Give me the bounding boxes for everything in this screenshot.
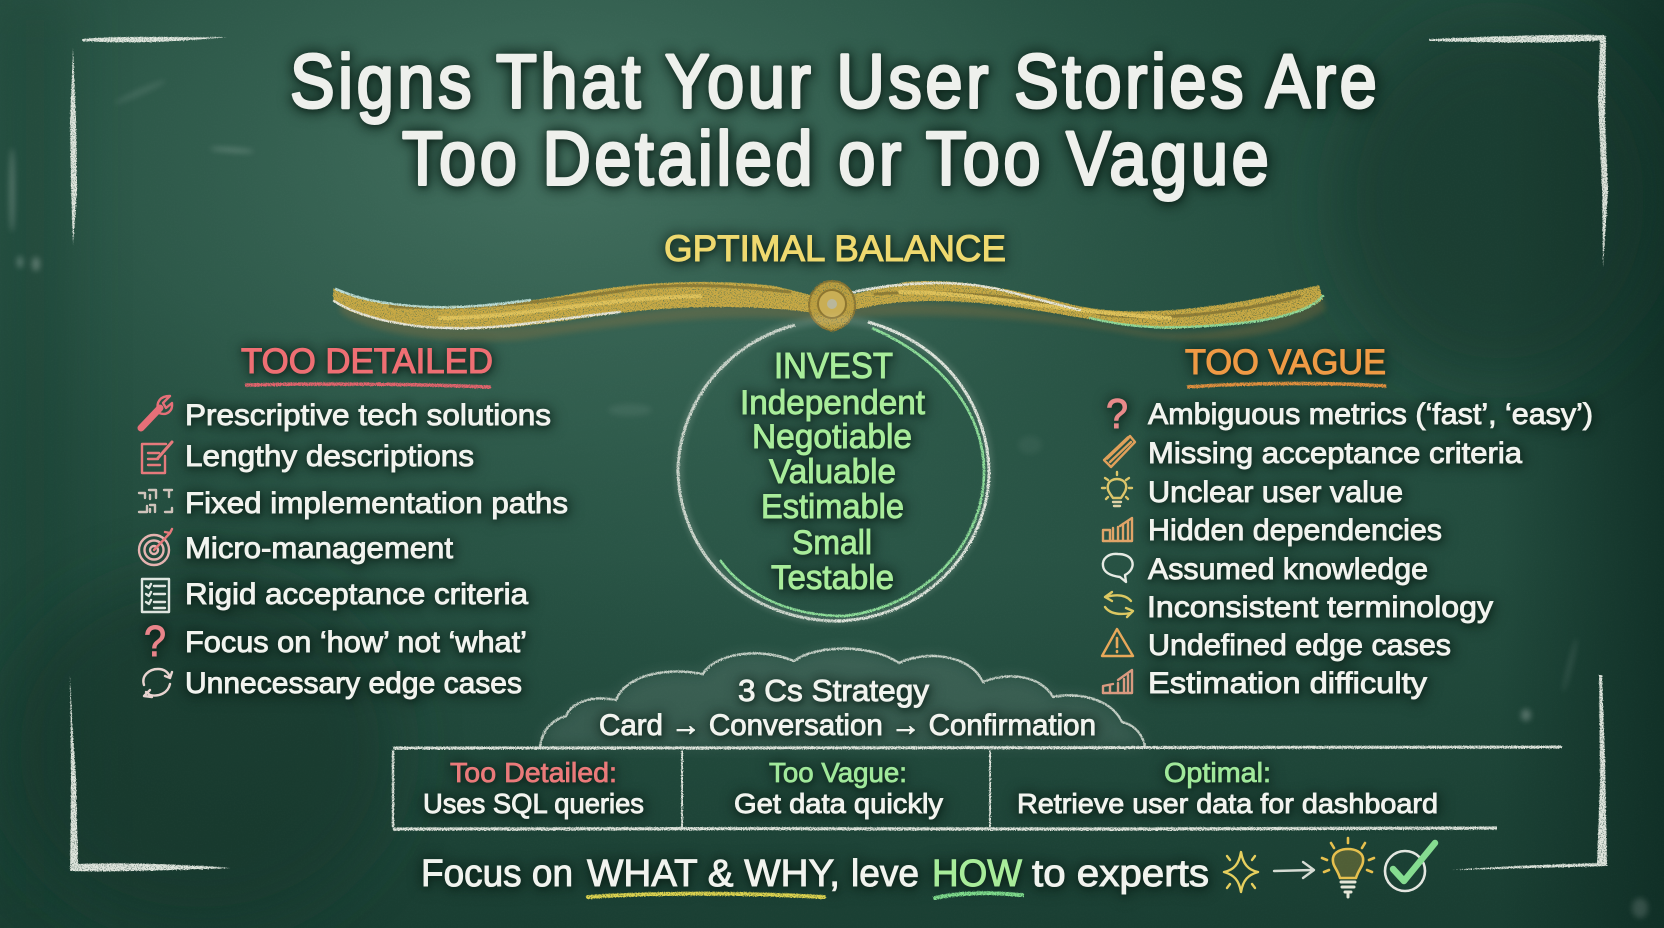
icon: bar chart — [1103, 518, 1132, 541]
footer message: to experts — [1032, 853, 1209, 895]
list: too vague signs: Inconsistent terminology — [1147, 591, 1493, 624]
invest list: Valuable — [769, 453, 896, 491]
cell: optimal: Optimal: — [1164, 757, 1271, 788]
table: user story examples — [393, 747, 1562, 829]
icon: bar chart small — [1103, 670, 1132, 693]
balance beam — [333, 281, 1326, 341]
icon: pencil — [1104, 436, 1135, 467]
cell: too vague: Get data quickly — [734, 788, 943, 819]
list: too detailed signs — [185, 399, 568, 700]
cell: optimal: Retrieve user data for dashboard — [1017, 788, 1438, 819]
cloud: 3 Cs strategy — [540, 648, 1145, 747]
list: too detailed signs: Unnecessary edge cases — [185, 667, 522, 700]
heading: too vague: TOO VAGUE — [1185, 343, 1386, 382]
list: too detailed signs: Lengthy descriptions — [185, 440, 474, 473]
invest list: Independent — [740, 384, 926, 422]
invest list: Small — [792, 524, 872, 562]
icon: sparkle — [1224, 852, 1258, 892]
footer message: WHAT & WHY, — [587, 853, 840, 895]
icon: light bulb — [1102, 472, 1132, 506]
footer message: HOW — [932, 853, 1022, 895]
icon: check mark in circle — [1385, 843, 1435, 891]
icon: checklist — [142, 579, 169, 612]
title — [290, 40, 1377, 201]
list: too vague signs — [1147, 398, 1593, 700]
invest list: Testable — [771, 559, 894, 597]
list: too detailed signs: Micro-management — [185, 532, 454, 565]
panel: invest circle — [678, 320, 989, 621]
icon: document with pencil — [142, 442, 172, 473]
list: too detailed signs: Focus on ‘how’ not ‘what’ — [185, 626, 527, 659]
title: Too Detailed or Too Vague — [402, 117, 1269, 201]
list: too detailed signs: Rigid acceptance criteria — [185, 578, 528, 611]
list: too vague signs: Missing acceptance criteria — [1148, 437, 1522, 470]
list: too vague signs: Ambiguous metrics (‘fast’, ‘easy’) — [1148, 398, 1593, 431]
footer message: Focus on — [421, 853, 573, 895]
invest list: INVEST — [774, 345, 893, 386]
cell: too vague — [734, 757, 943, 819]
icon: target — [139, 529, 172, 565]
icon: question mark: ? — [144, 617, 166, 666]
panel: too detailed — [139, 342, 568, 700]
list: too vague signs: Unclear user value — [1148, 476, 1403, 509]
cloud: 3 Cs strategy: 3 Cs Strategy — [738, 673, 929, 708]
cell: too vague: Too Vague: — [769, 757, 907, 788]
panel: too vague — [1102, 343, 1593, 700]
icon: wrench — [141, 396, 172, 428]
list: too vague signs: Hidden dependencies — [1148, 514, 1442, 547]
heading: too detailed: TOO DETAILED — [241, 342, 493, 381]
list: too vague signs: Estimation difficulty — [1148, 667, 1427, 700]
icon: speech bubble — [1103, 554, 1133, 582]
chalk circle — [678, 320, 989, 621]
footer message — [421, 838, 1435, 898]
icon: fixed paths — [139, 490, 172, 512]
cell: too detailed: Uses SQL queries — [423, 788, 644, 819]
icon: question mark: ? — [1106, 390, 1128, 437]
icon: warning triangle — [1102, 629, 1133, 656]
cell: optimal — [1017, 757, 1438, 819]
list: too vague signs: Undefined edge cases — [1148, 629, 1451, 662]
icon: light bulb — [1322, 838, 1374, 897]
cell: too detailed — [423, 757, 644, 819]
cloud: 3 Cs strategy: Card → Conversation → Confirmation — [599, 709, 1096, 742]
invest list: Negotiable — [752, 418, 912, 456]
icon: swap arrows — [1105, 592, 1133, 617]
invest list — [740, 345, 926, 597]
list: too detailed signs: Prescriptive tech solutions — [185, 399, 551, 432]
list: too detailed signs: Fixed implementation paths — [185, 487, 568, 520]
title: Signs That Your User Stories Are — [290, 40, 1377, 124]
heading: optimal balance: GPTIMAL BALANCE — [664, 228, 1006, 269]
footer message: leve — [851, 853, 919, 895]
list: too vague signs: Assumed knowledge — [1148, 553, 1428, 586]
arrow — [1274, 862, 1314, 878]
invest list: Estimable — [761, 488, 904, 526]
cell: too detailed: Too Detailed: — [450, 757, 617, 788]
icon: cycle arrows — [143, 669, 172, 697]
